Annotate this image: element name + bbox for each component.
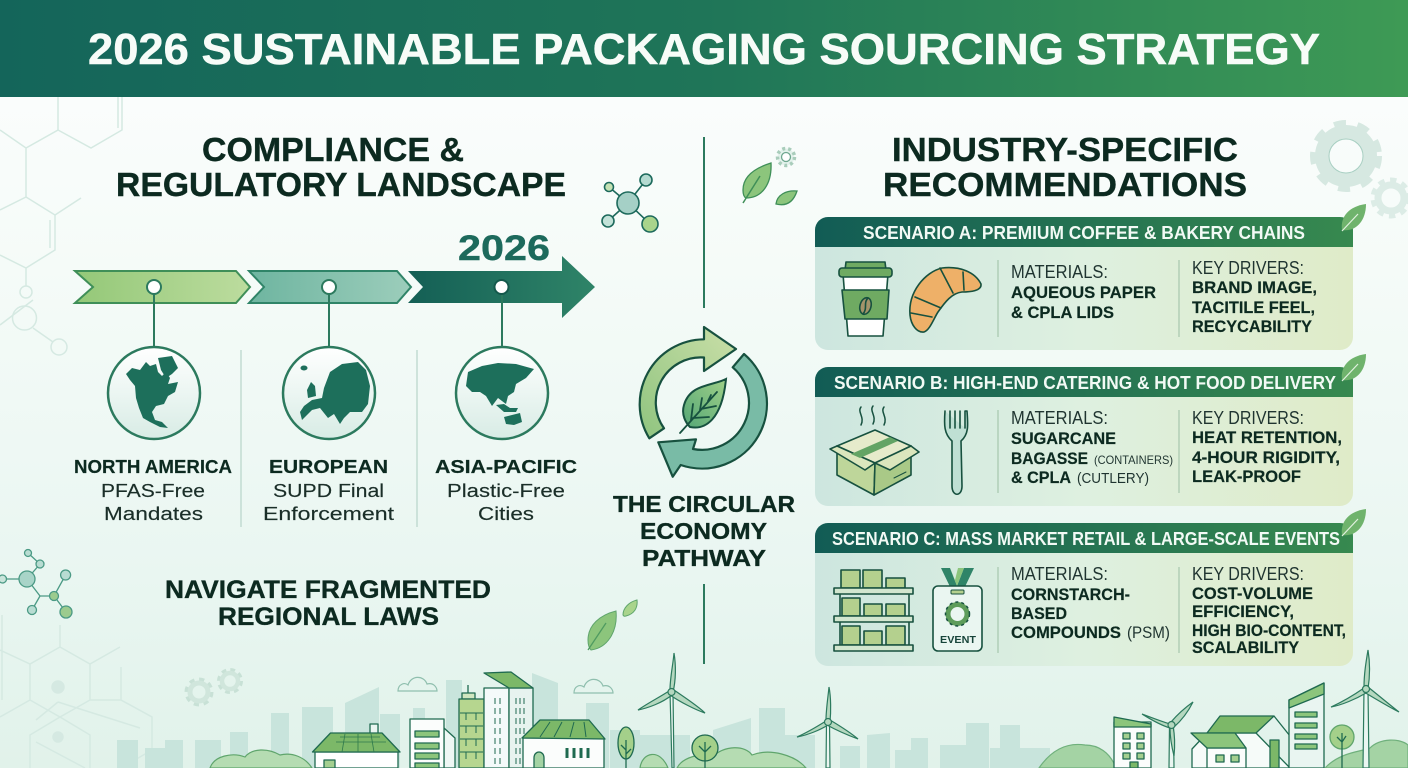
back house — [1192, 716, 1290, 768]
panel: scenario B: SCENARIO B: HIGH-END CATERING & HOT FOOD DELIVERY — [834, 373, 1336, 393]
region text: north america: NORTH AMERICA — [74, 457, 232, 477]
region text: european — [263, 457, 394, 524]
house right of tower — [522, 720, 605, 768]
scenario B header — [815, 367, 1353, 397]
icon: gears top right — [1315, 125, 1408, 215]
city left — [312, 672, 718, 768]
chevron 3 — [408, 256, 595, 318]
drivers A: RECYCABILITY — [1192, 317, 1313, 336]
wind turbine 3 — [1142, 702, 1193, 768]
leaf — [683, 379, 726, 427]
front house — [1191, 733, 1246, 768]
drivers C — [1192, 564, 1346, 657]
drivers B: HEAT RETENTION, — [1192, 428, 1342, 447]
bushes — [210, 740, 1408, 768]
materials B: BAGASSE — [1011, 449, 1088, 468]
globe: europe — [283, 347, 375, 439]
materials B: (CUTLERY) — [1077, 470, 1149, 487]
icons: clouds — [398, 677, 613, 693]
region text: european: Enforcement — [263, 503, 394, 524]
drivers B: LEAK-PROOF — [1192, 467, 1301, 486]
materials A: & CPLA LIDS — [1011, 303, 1114, 322]
materials C — [1011, 564, 1170, 642]
globe: asia-pacific — [456, 347, 548, 439]
materials B: & CPLA — [1011, 468, 1071, 487]
city right — [1114, 683, 1354, 768]
materials C: MATERIALS: — [1011, 564, 1108, 584]
background hexagon pattern bottom-left — [0, 615, 152, 768]
panel: scenario A — [815, 204, 1366, 350]
icon: circular economy arrows — [640, 327, 767, 477]
materials C: (PSM) — [1127, 623, 1170, 642]
materials A: AQUEOUS PAPER — [1011, 283, 1156, 302]
icon: molecule left — [0, 550, 72, 618]
drivers C: EFFICIENCY, — [1192, 602, 1294, 621]
icon: coffee cup — [839, 262, 892, 336]
materials B: MATERIALS: — [1011, 408, 1108, 428]
tree right — [1330, 725, 1354, 768]
heading: recommendations — [883, 131, 1247, 203]
skyline background — [117, 673, 1050, 768]
region text: north america — [74, 457, 232, 524]
leaf B — [1342, 354, 1366, 381]
heading: compliance — [116, 131, 566, 203]
region text: asia-pacific: Plastic-Free — [447, 480, 565, 501]
materials A: MATERIALS: — [1011, 262, 1108, 282]
panel: scenario C — [815, 509, 1366, 666]
label: circular economy: THE CIRCULAR — [613, 491, 795, 517]
icon: retail shelf — [834, 570, 913, 651]
callout: navigate: NAVIGATE FRAGMENTED — [165, 576, 491, 604]
leaf C — [1342, 509, 1366, 536]
heading: compliance: REGULATORY LANDSCAPE — [116, 166, 566, 203]
region text: european: SUPD Final — [273, 480, 384, 501]
drivers A: KEY DRIVERS: — [1192, 258, 1304, 278]
drivers B: KEY DRIVERS: — [1192, 408, 1304, 428]
globe: north america — [108, 347, 200, 439]
drivers B — [1192, 408, 1342, 486]
tall tower — [484, 672, 533, 768]
drivers A: TACITILE FEEL, — [1192, 298, 1315, 317]
materials C: CORNSTARCH- — [1011, 585, 1130, 604]
tree — [618, 727, 634, 768]
year label: 2026 — [458, 229, 550, 268]
region text: european: EUROPEAN — [269, 457, 388, 477]
heading: compliance: COMPLIANCE & — [202, 131, 464, 168]
icons: gears bottom — [188, 671, 240, 703]
icon: croissant — [910, 268, 981, 332]
label: circular economy: PATHWAY — [642, 545, 766, 571]
scenario C header — [815, 523, 1353, 553]
header banner — [0, 0, 1408, 97]
center dividers — [703, 137, 705, 664]
timeline arrow — [75, 229, 595, 346]
callout: navigate: REGIONAL LAWS — [218, 603, 439, 631]
icon: leaves and gear top — [743, 148, 797, 205]
drivers C: SCALABILITY — [1192, 638, 1300, 657]
green tower — [459, 685, 484, 768]
label: circular economy — [613, 491, 795, 571]
drivers C: KEY DRIVERS: — [1192, 564, 1304, 584]
region text: north america: PFAS-Free — [101, 480, 205, 501]
leaf A — [1342, 204, 1366, 231]
callout: navigate — [165, 576, 491, 631]
materials B: SUGARCANE — [1011, 429, 1116, 448]
icon: leaves lower center — [588, 600, 637, 650]
chevron 1 — [75, 271, 250, 303]
icon: event badge: EVENT — [940, 634, 977, 646]
icon: molecule — [602, 174, 658, 232]
drivers B: 4-HOUR RIGIDITY, — [1192, 448, 1340, 467]
apartment block — [1114, 717, 1151, 768]
materials C: COMPOUNDS — [1011, 623, 1121, 642]
drivers C: HIGH BIO-CONTENT, — [1192, 621, 1346, 640]
materials C: BASED — [1011, 604, 1067, 623]
icon: steam — [860, 406, 885, 425]
icon: event badge — [933, 568, 982, 651]
tall block — [1289, 683, 1324, 768]
office building — [410, 719, 455, 768]
drivers A — [1192, 258, 1317, 336]
house with solar roof — [312, 724, 400, 768]
region text: north america: Mandates — [104, 503, 203, 524]
region text: asia-pacific — [435, 457, 577, 524]
chevron 2 — [249, 271, 411, 303]
icon: fork — [945, 411, 968, 494]
drivers A: BRAND IMAGE, — [1192, 278, 1317, 297]
wind turbine 4 — [1331, 650, 1399, 768]
wind turbine 2 — [797, 687, 858, 768]
materials A — [1011, 262, 1156, 322]
label: circular economy: ECONOMY — [640, 518, 767, 544]
panel: scenario B — [815, 354, 1366, 506]
heading: recommendations: RECOMMENDATIONS — [883, 166, 1247, 203]
wind turbine 1 — [638, 653, 705, 768]
region text: asia-pacific: Cities — [478, 503, 534, 524]
background hexagon pattern top-left — [0, 97, 122, 355]
title: 2026 SUSTAINABLE PACKAGING SOURCING STRATEGY — [88, 25, 1320, 74]
drivers C: COST-VOLUME — [1192, 584, 1313, 603]
scenario A header — [815, 217, 1353, 247]
panel: scenario A: SCENARIO A: PREMIUM COFFEE & BAKERY CHAINS — [863, 223, 1305, 243]
region text: asia-pacific: ASIA-PACIFIC — [435, 457, 577, 477]
materials B — [1011, 408, 1173, 487]
heading: recommendations: INDUSTRY-SPECIFIC — [892, 131, 1238, 168]
materials B: (CONTAINERS) — [1094, 453, 1173, 467]
icon: food box — [830, 430, 919, 495]
tree 2 — [692, 735, 718, 768]
panel: scenario C: SCENARIO C: MASS MARKET RETAIL & LARGE-SCALE EVENTS — [832, 529, 1340, 549]
